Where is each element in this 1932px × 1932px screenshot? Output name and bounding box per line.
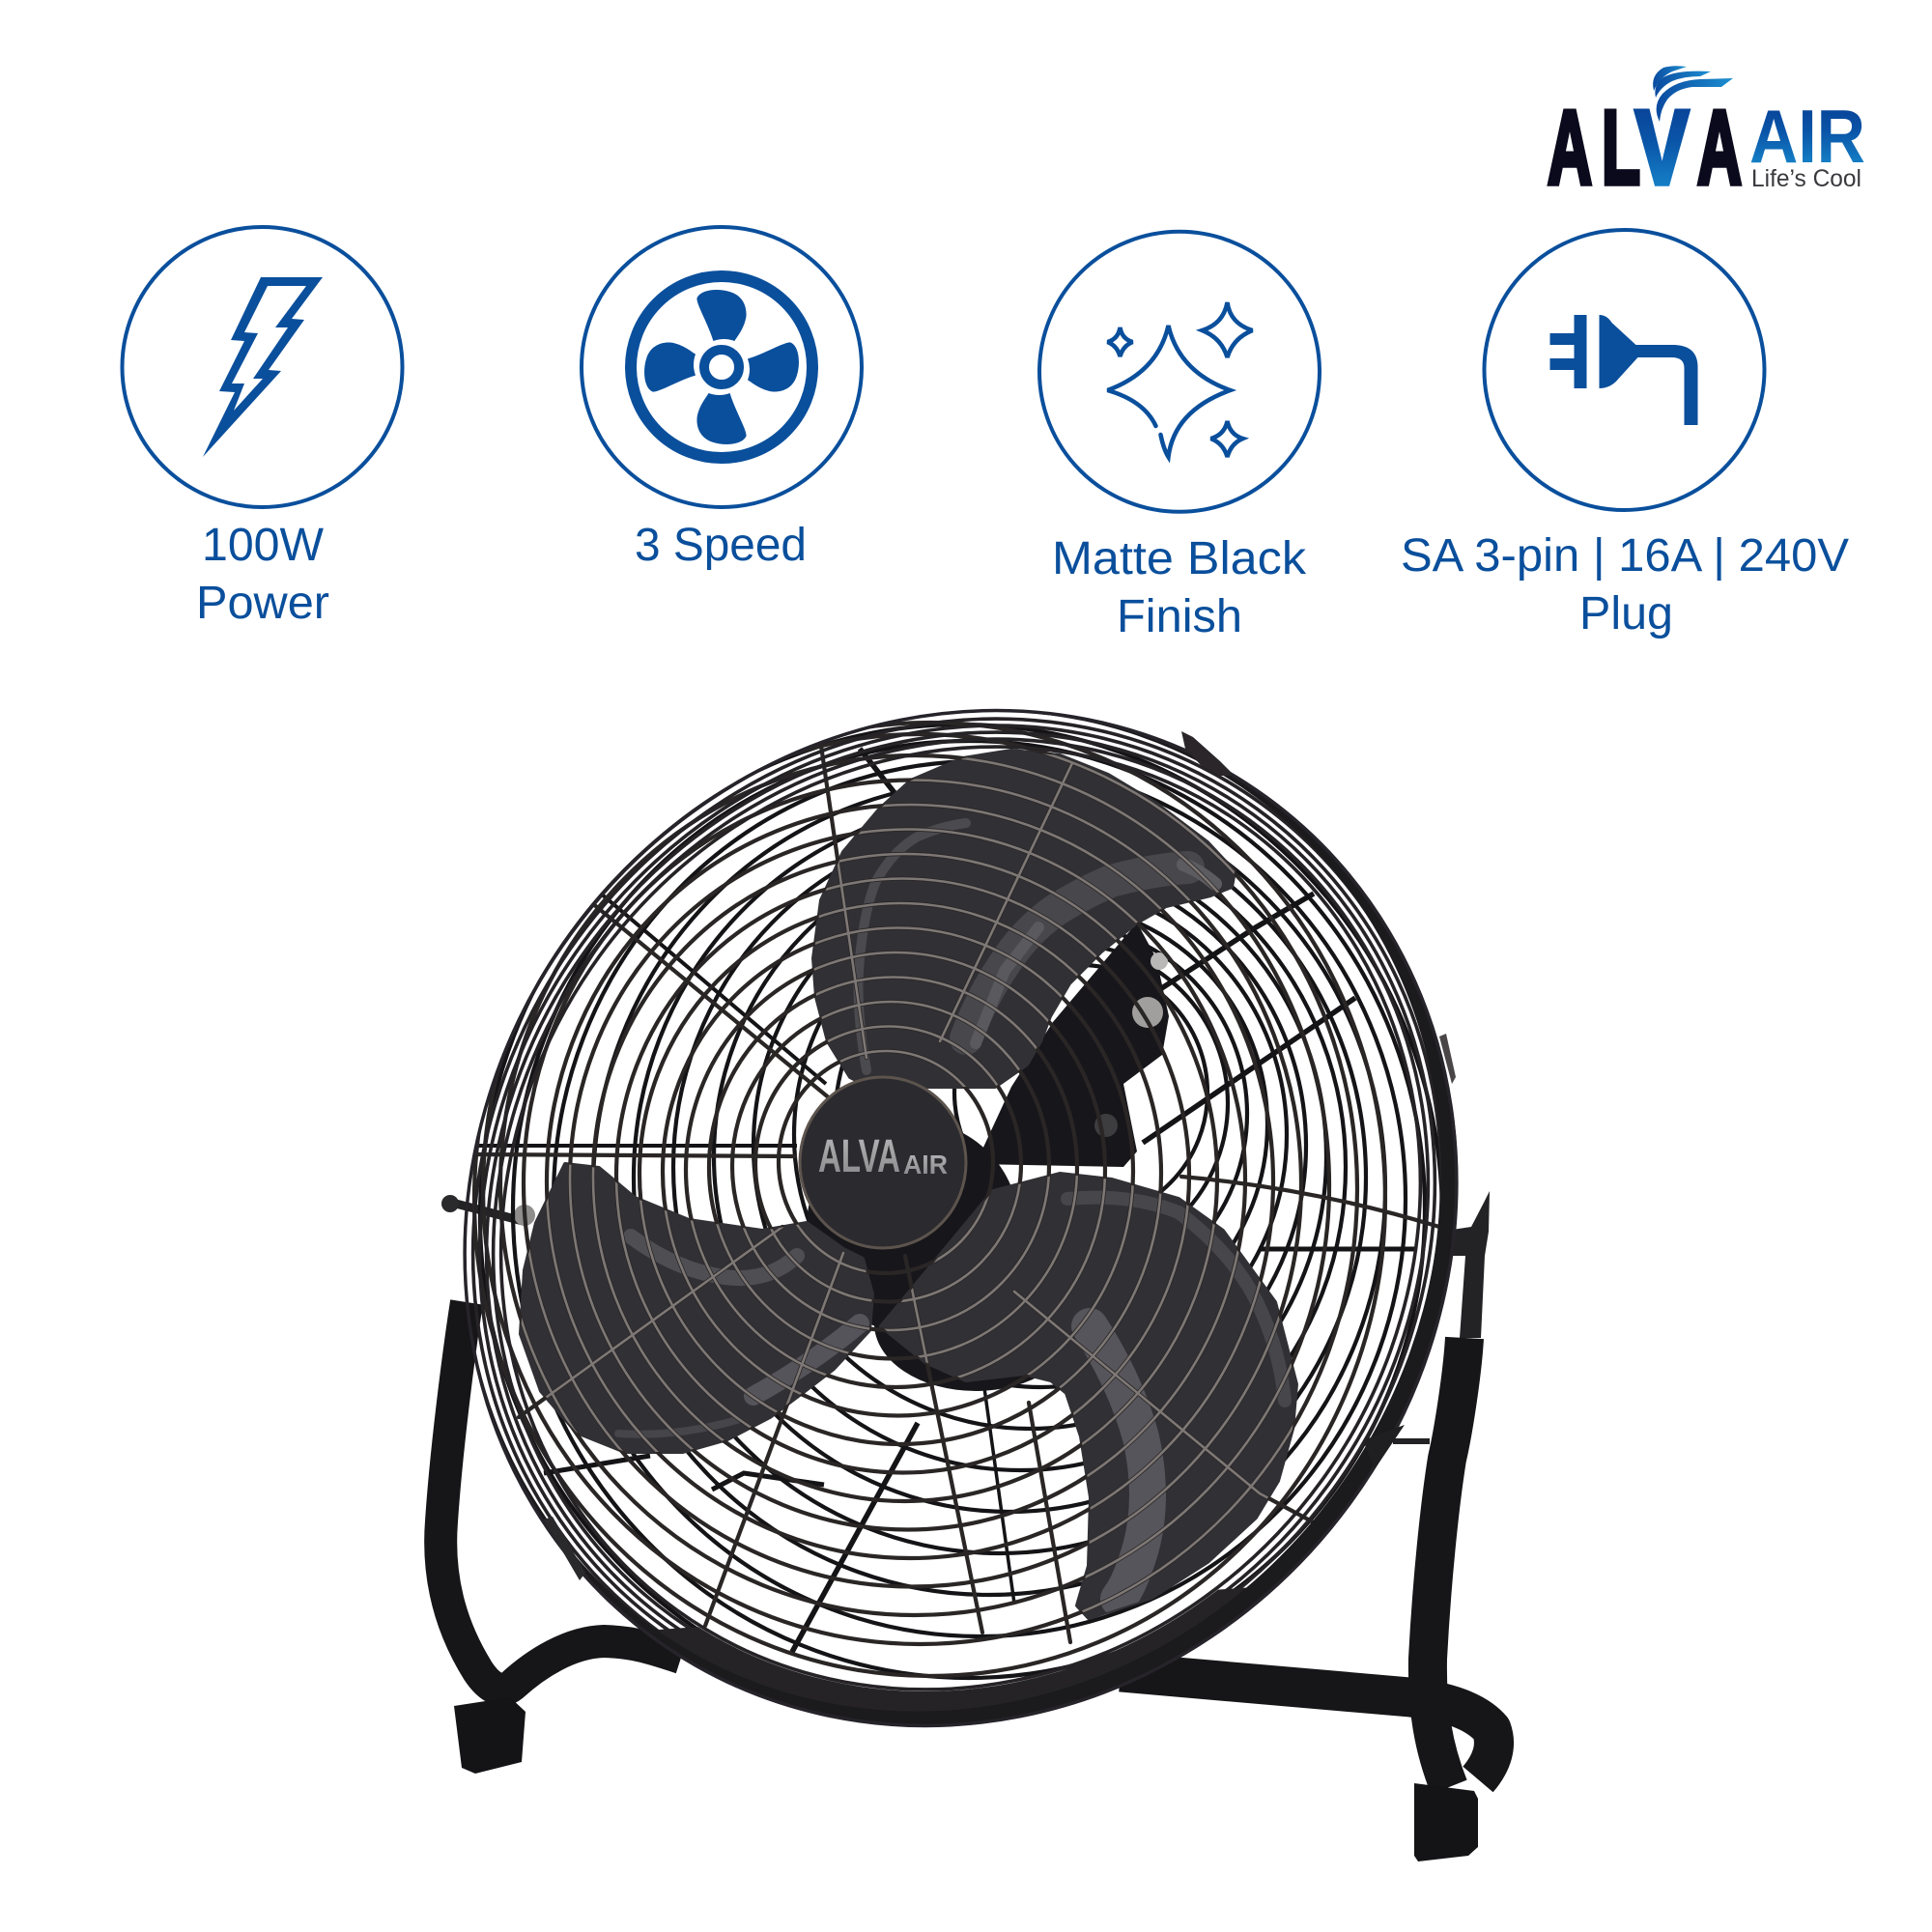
fan stand: left foot	[454, 1697, 526, 1774]
fan stand: right tube	[1428, 1338, 1464, 1787]
hub disc	[800, 1077, 966, 1248]
pivot: right bracket	[1452, 1191, 1490, 1338]
label: 100W	[202, 520, 325, 571]
hub logo AIR: AIR	[903, 1150, 948, 1179]
label second line: Plug	[1579, 588, 1673, 639]
back grille and spokes	[473, 724, 1442, 1710]
icon: sparkles	[1107, 302, 1252, 457]
front wires lighter over blades	[522, 753, 1293, 1613]
logo wordmark ALVA: L	[1602, 89, 1640, 207]
fan stand: left tube	[440, 1302, 681, 1690]
rim thin edge	[265, 514, 1657, 1922]
logo wordmark ALVA: A	[1548, 89, 1592, 207]
rim tab lower left	[544, 1517, 585, 1580]
label second line: Power	[196, 578, 329, 629]
feature: SA plug	[1401, 230, 1849, 639]
icon: lightning bolt	[203, 277, 323, 457]
logo wordmark ALVA: V	[1635, 89, 1689, 207]
label: 3 Speed	[635, 520, 807, 571]
motor housing	[807, 923, 1169, 1391]
logo: Alva Air	[1548, 66, 1865, 207]
feature: matte black finish	[1039, 232, 1320, 642]
logo tagline: Life’s Cool	[1751, 165, 1861, 192]
fan stand: rear tube	[1121, 1672, 1494, 1779]
icon: fan	[631, 276, 812, 458]
logo wordmark ALVA: A	[1697, 89, 1742, 207]
rim tab lower right	[1363, 1425, 1405, 1469]
icon: circle	[122, 227, 402, 507]
icon: circle	[582, 227, 862, 507]
motor bolts	[1094, 952, 1168, 1137]
rear rod	[1393, 1438, 1430, 1444]
logo wing feathers	[1653, 66, 1733, 122]
rim wires	[276, 526, 1645, 1911]
feature: 3 speed	[582, 227, 862, 571]
icon: plug	[1549, 315, 1698, 425]
outer rim band	[262, 511, 1659, 1924]
feature: 100W power	[122, 227, 402, 629]
fan blades	[521, 751, 1296, 1618]
hub	[800, 1077, 966, 1248]
icon: circle	[1039, 232, 1320, 512]
fan stand: right foot	[1414, 1783, 1478, 1861]
product photo: floor fan	[424, 709, 1515, 1861]
bottom shadow band of grille	[659, 1588, 1246, 1710]
label: Matte Black	[1052, 533, 1307, 584]
icon: circle	[1484, 230, 1764, 510]
rim clip top right	[1181, 731, 1232, 776]
hub logo ALVA: ALVA	[818, 1131, 900, 1182]
logo wordmark ALVA	[1548, 89, 1742, 207]
rim tab right	[1439, 1034, 1456, 1084]
label second line: Finish	[1117, 591, 1242, 642]
blade highlights	[618, 823, 1285, 1599]
pivot: left bracket rod	[441, 1195, 535, 1226]
logo wordmark AIR: AIR	[1749, 94, 1865, 179]
front grille rings	[473, 723, 1439, 1676]
label: SA 3-pin | 16A | 240V	[1401, 530, 1849, 582]
